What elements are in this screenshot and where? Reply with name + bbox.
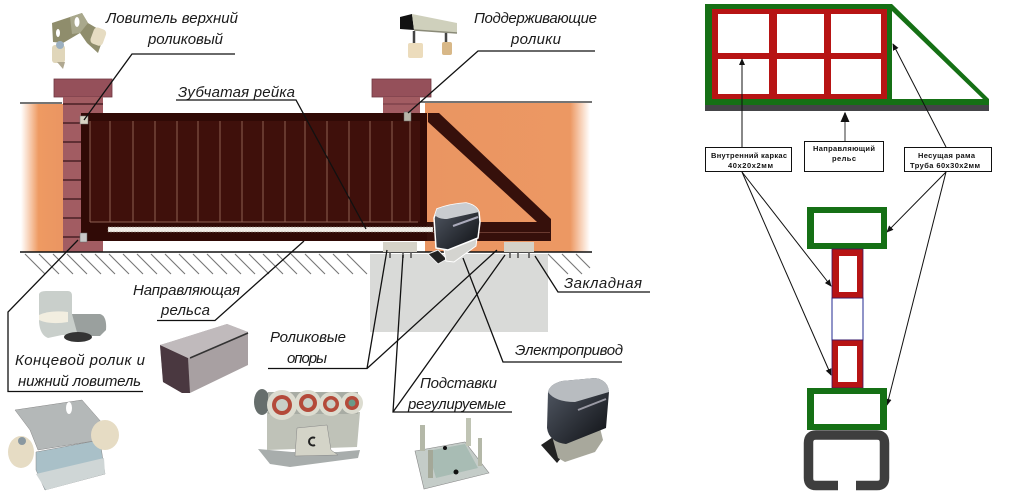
label: roller supports: Роликовые — [270, 329, 346, 346]
rail profile — [808, 435, 884, 486]
drive motor on the gate — [428, 203, 480, 264]
label: support rollers: ролики — [510, 31, 562, 48]
inner frame — [712, 9, 887, 99]
sliding gate — [81, 113, 551, 241]
label: roller supports — [268, 250, 497, 368]
label: rack — [176, 84, 366, 229]
arrow: guide rail — [844, 113, 846, 141]
box: guide rail — [804, 142, 884, 172]
carriages on the ground — [383, 242, 534, 258]
wall: left orange section — [21, 104, 65, 252]
box: guide rail: рельс — [832, 154, 856, 163]
label: support rollers: Поддерживающие — [474, 10, 597, 27]
label: embedded plate: Закладная — [564, 275, 642, 292]
label: adjustable stands: регулируемые — [407, 396, 506, 413]
label: embedded plate — [535, 256, 650, 292]
right brick pillar — [372, 79, 431, 113]
carrying frame — [705, 4, 892, 105]
label: support rollers — [408, 10, 597, 113]
label: roller supports: опоры — [287, 350, 327, 367]
icon: roller carriage — [254, 389, 363, 467]
label: electric drive: Электропривод — [515, 342, 623, 359]
lower beam highlight — [433, 232, 550, 234]
box: guide rail: Направляющий — [813, 144, 875, 153]
box: carrying frame: Несущая рама — [918, 151, 976, 160]
wall top lines — [20, 102, 592, 103]
ground line — [20, 251, 592, 253]
label: end roller — [8, 240, 146, 392]
box: inner frame — [706, 148, 792, 172]
label: top catcher: Ловитель верхний — [105, 10, 239, 27]
label: adjustable stands — [393, 255, 512, 413]
small fittings on gate — [80, 112, 411, 242]
blue web — [832, 298, 863, 340]
arrows: inner frame to section — [742, 172, 831, 375]
label: guide rail: Направляющая — [133, 282, 240, 299]
gate frame diagram — [705, 4, 989, 111]
concrete foundation — [370, 254, 548, 332]
cross-section — [807, 207, 887, 486]
label: rack: Зубчатая рейка — [178, 84, 295, 101]
label: end roller: нижний ловитель — [18, 373, 141, 390]
label: top catcher — [84, 10, 239, 120]
label: end roller: Концевой ролик и — [15, 352, 146, 369]
icon: end roller — [39, 291, 106, 342]
icon: guide rail section — [160, 324, 248, 393]
icon: support rollers — [400, 14, 457, 58]
upper red tube — [832, 249, 863, 298]
box: carrying frame: Труба 60х30х2мм — [910, 161, 980, 170]
arrow: inner frame top — [741, 59, 743, 147]
left brick pillar — [54, 79, 112, 252]
wall: right orange section — [425, 103, 590, 252]
box: inner frame: 40х20х2мм — [728, 161, 773, 170]
rail strip — [705, 105, 989, 111]
icon: adjustable stand — [415, 418, 489, 489]
lower green tube — [807, 388, 887, 430]
box: inner frame: Внутренний каркас — [711, 151, 787, 160]
label: guide rail — [133, 241, 304, 320]
label: electric drive — [463, 258, 623, 362]
arrow: carrying frame top — [893, 44, 946, 147]
icon: lower catcher — [8, 400, 119, 490]
label: top catcher: роликовый — [147, 31, 224, 48]
toothed rack — [108, 227, 433, 232]
label: adjustable stands: Подставки — [420, 375, 498, 392]
lower red tube — [832, 340, 863, 388]
box: carrying frame — [904, 148, 992, 172]
icon: electric drive — [541, 378, 609, 463]
top green tube — [807, 207, 887, 249]
ground hatching — [25, 254, 590, 274]
icon: top roller catcher — [52, 13, 107, 69]
label: guide rail: рельса — [160, 302, 210, 319]
arrows: carrying frame to section — [887, 172, 946, 405]
